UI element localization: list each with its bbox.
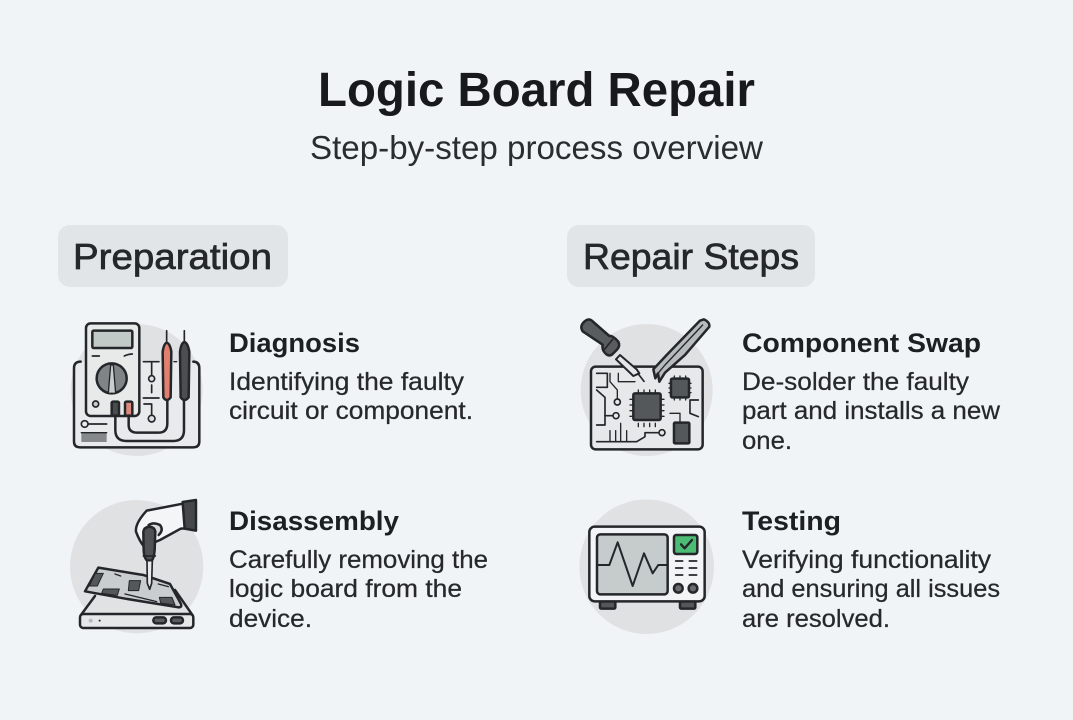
heading: diagnosis: Diagnosis bbox=[229, 328, 360, 358]
step: component swap bbox=[581, 319, 1001, 456]
title: Logic Board Repair bbox=[318, 64, 755, 117]
heading: repair steps bbox=[567, 225, 815, 287]
text: testing: and ensuring all issues bbox=[742, 575, 1000, 603]
text: testing bbox=[742, 546, 1000, 633]
heading: repair steps: Repair Steps bbox=[583, 236, 799, 277]
text: diagnosis: circuit or component. bbox=[229, 397, 473, 425]
text: disassembly: device. bbox=[229, 605, 312, 633]
icon: soldering iron and tweezers on circuit board bbox=[581, 319, 713, 456]
heading: preparation bbox=[58, 225, 288, 287]
heading: preparation: Preparation bbox=[73, 236, 272, 277]
icon: screwdriver and laptop bbox=[70, 500, 203, 633]
panel: repair steps bbox=[567, 225, 1001, 634]
text: testing: are resolved. bbox=[742, 605, 890, 633]
heading: component swap: Component Swap bbox=[742, 328, 981, 358]
text: disassembly: logic board from the bbox=[229, 575, 462, 603]
heading: testing: Testing bbox=[742, 506, 841, 536]
step: testing bbox=[579, 499, 1000, 634]
text: component swap: De-solder the faulty bbox=[742, 368, 970, 396]
text: disassembly bbox=[229, 546, 488, 633]
text: disassembly: Carefully removing the bbox=[229, 546, 488, 574]
text: diagnosis: Identifying the faulty bbox=[229, 368, 465, 396]
step: disassembly bbox=[70, 500, 488, 633]
panel: preparation bbox=[58, 225, 488, 633]
subtitle: Step-by-step process overview bbox=[310, 129, 763, 166]
text: component swap bbox=[742, 368, 1001, 455]
text: diagnosis bbox=[229, 368, 473, 425]
icon: multimeter bbox=[71, 323, 203, 456]
text: testing: Verifying functionality bbox=[742, 546, 992, 574]
heading: disassembly: Disassembly bbox=[229, 506, 399, 536]
text: component swap: part and installs a new bbox=[742, 397, 1001, 425]
icon: oscilloscope monitor bbox=[579, 499, 714, 634]
step: diagnosis bbox=[71, 323, 473, 456]
text: component swap: one. bbox=[742, 427, 792, 455]
